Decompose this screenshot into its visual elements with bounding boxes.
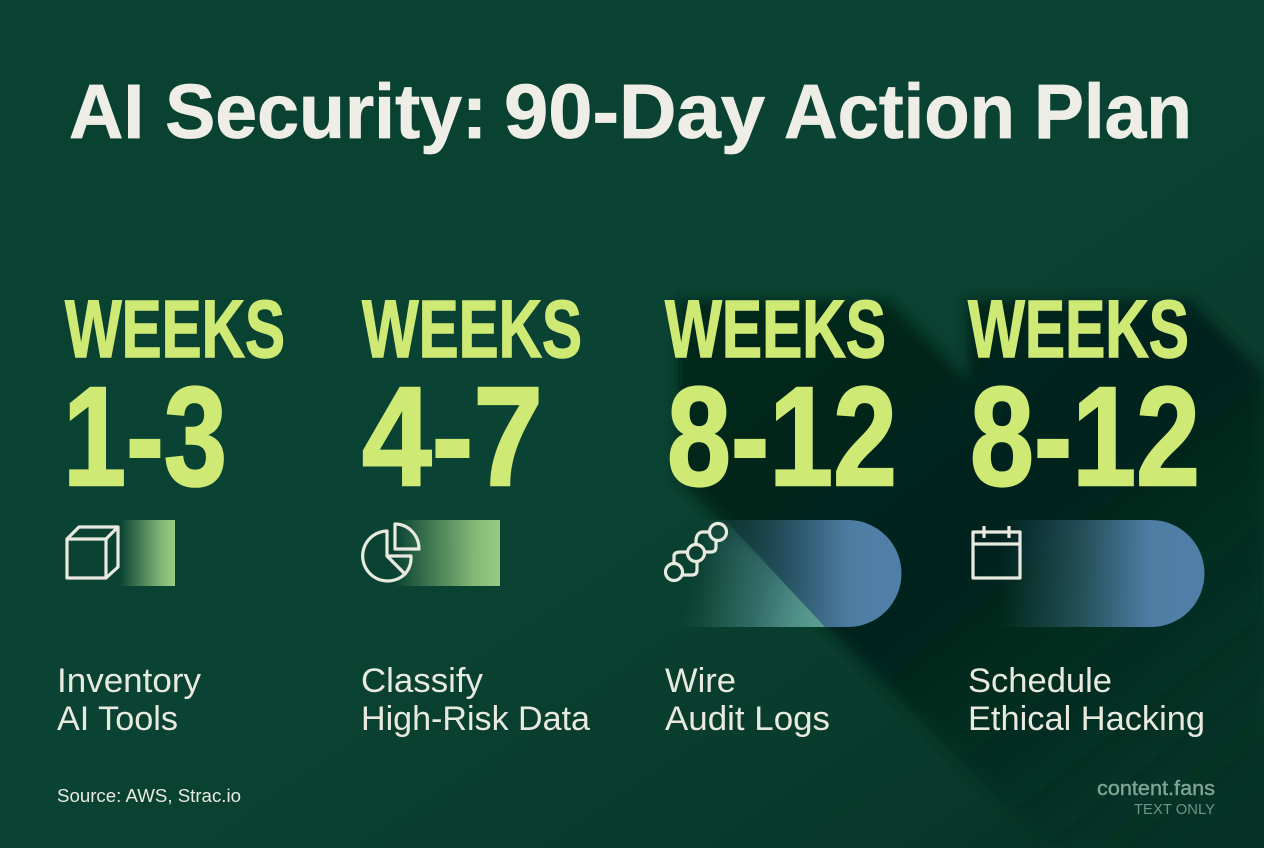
range: 1-3: 1-3	[63, 357, 227, 515]
label: Classify	[361, 662, 483, 700]
label: Inventory	[57, 662, 201, 700]
heading: WEEKS: WEEKS	[665, 284, 886, 375]
column 2: weeks 4-7	[361, 284, 590, 738]
label line 2: Audit Logs	[665, 700, 830, 738]
range: 8-12: 8-12	[667, 357, 897, 515]
brand tag: TEXT ONLY	[1134, 801, 1215, 818]
range: 8-12: 8-12	[970, 357, 1200, 515]
title	[69, 69, 1192, 155]
progress bar	[395, 520, 500, 586]
heading: WEEKS: WEEKS	[65, 284, 285, 375]
source note: Source: AWS, Strac.io	[57, 785, 241, 806]
long diagonal shadow	[678, 300, 1264, 848]
label: Schedule	[968, 662, 1112, 700]
heading: WEEKS: WEEKS	[362, 284, 582, 375]
column 4: weeks 8-12	[968, 284, 1205, 738]
icon: cube	[67, 527, 118, 578]
progress pill	[690, 520, 902, 627]
range: 4-7: 4-7	[362, 357, 543, 515]
title: AI Security:	[69, 69, 487, 155]
label line 2: High-Risk Data	[361, 700, 590, 738]
title: Plan	[1034, 69, 1192, 155]
progress bar	[120, 520, 175, 586]
title: Action	[784, 69, 1015, 155]
teal light wedge	[680, 520, 825, 627]
title: 90-Day	[504, 69, 765, 155]
label line 2: AI Tools	[57, 700, 178, 738]
icon: chain links	[666, 524, 726, 580]
label: Wire	[665, 662, 736, 700]
brand mark: content.fans	[1097, 777, 1215, 800]
icon: pie chart	[363, 524, 419, 581]
heading: WEEKS: WEEKS	[968, 284, 1189, 375]
column 1: weeks 1-3	[57, 284, 285, 738]
label line 2: Ethical Hacking	[968, 700, 1205, 738]
progress pill	[990, 520, 1204, 627]
icon: calendar	[973, 526, 1020, 578]
column 3: weeks 8-12	[665, 284, 902, 738]
